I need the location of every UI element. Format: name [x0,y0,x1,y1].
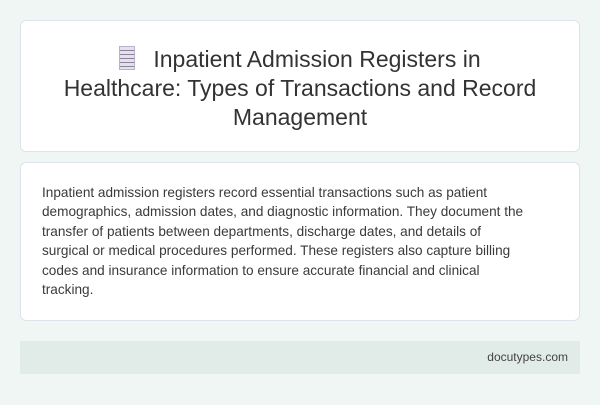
body text: codes and insurance information to ensure accurate financial and clinical [42,263,480,278]
panel: title card [20,20,580,152]
icon: register receipt [119,46,135,70]
title: Inpatient Admission Registers in [153,46,481,72]
title: Management [233,104,367,130]
body text: tracking. [42,282,93,297]
panel: description card [20,162,580,321]
body text [42,185,523,297]
body text: Inpatient admission registers record essential transactions such as patient [42,185,487,200]
footer: source [20,341,580,374]
title [64,46,536,130]
title: Healthcare: Types of Transactions and Record [64,75,536,101]
body text: demographics, admission dates, and diagnostic information. They document the [42,204,523,219]
body text: transfer of patients between departments, discharge dates, and details of [42,224,481,239]
body text: surgical or medical procedures performed. These registers also capture billing [42,243,510,258]
footer text: docutypes.com [487,350,568,364]
